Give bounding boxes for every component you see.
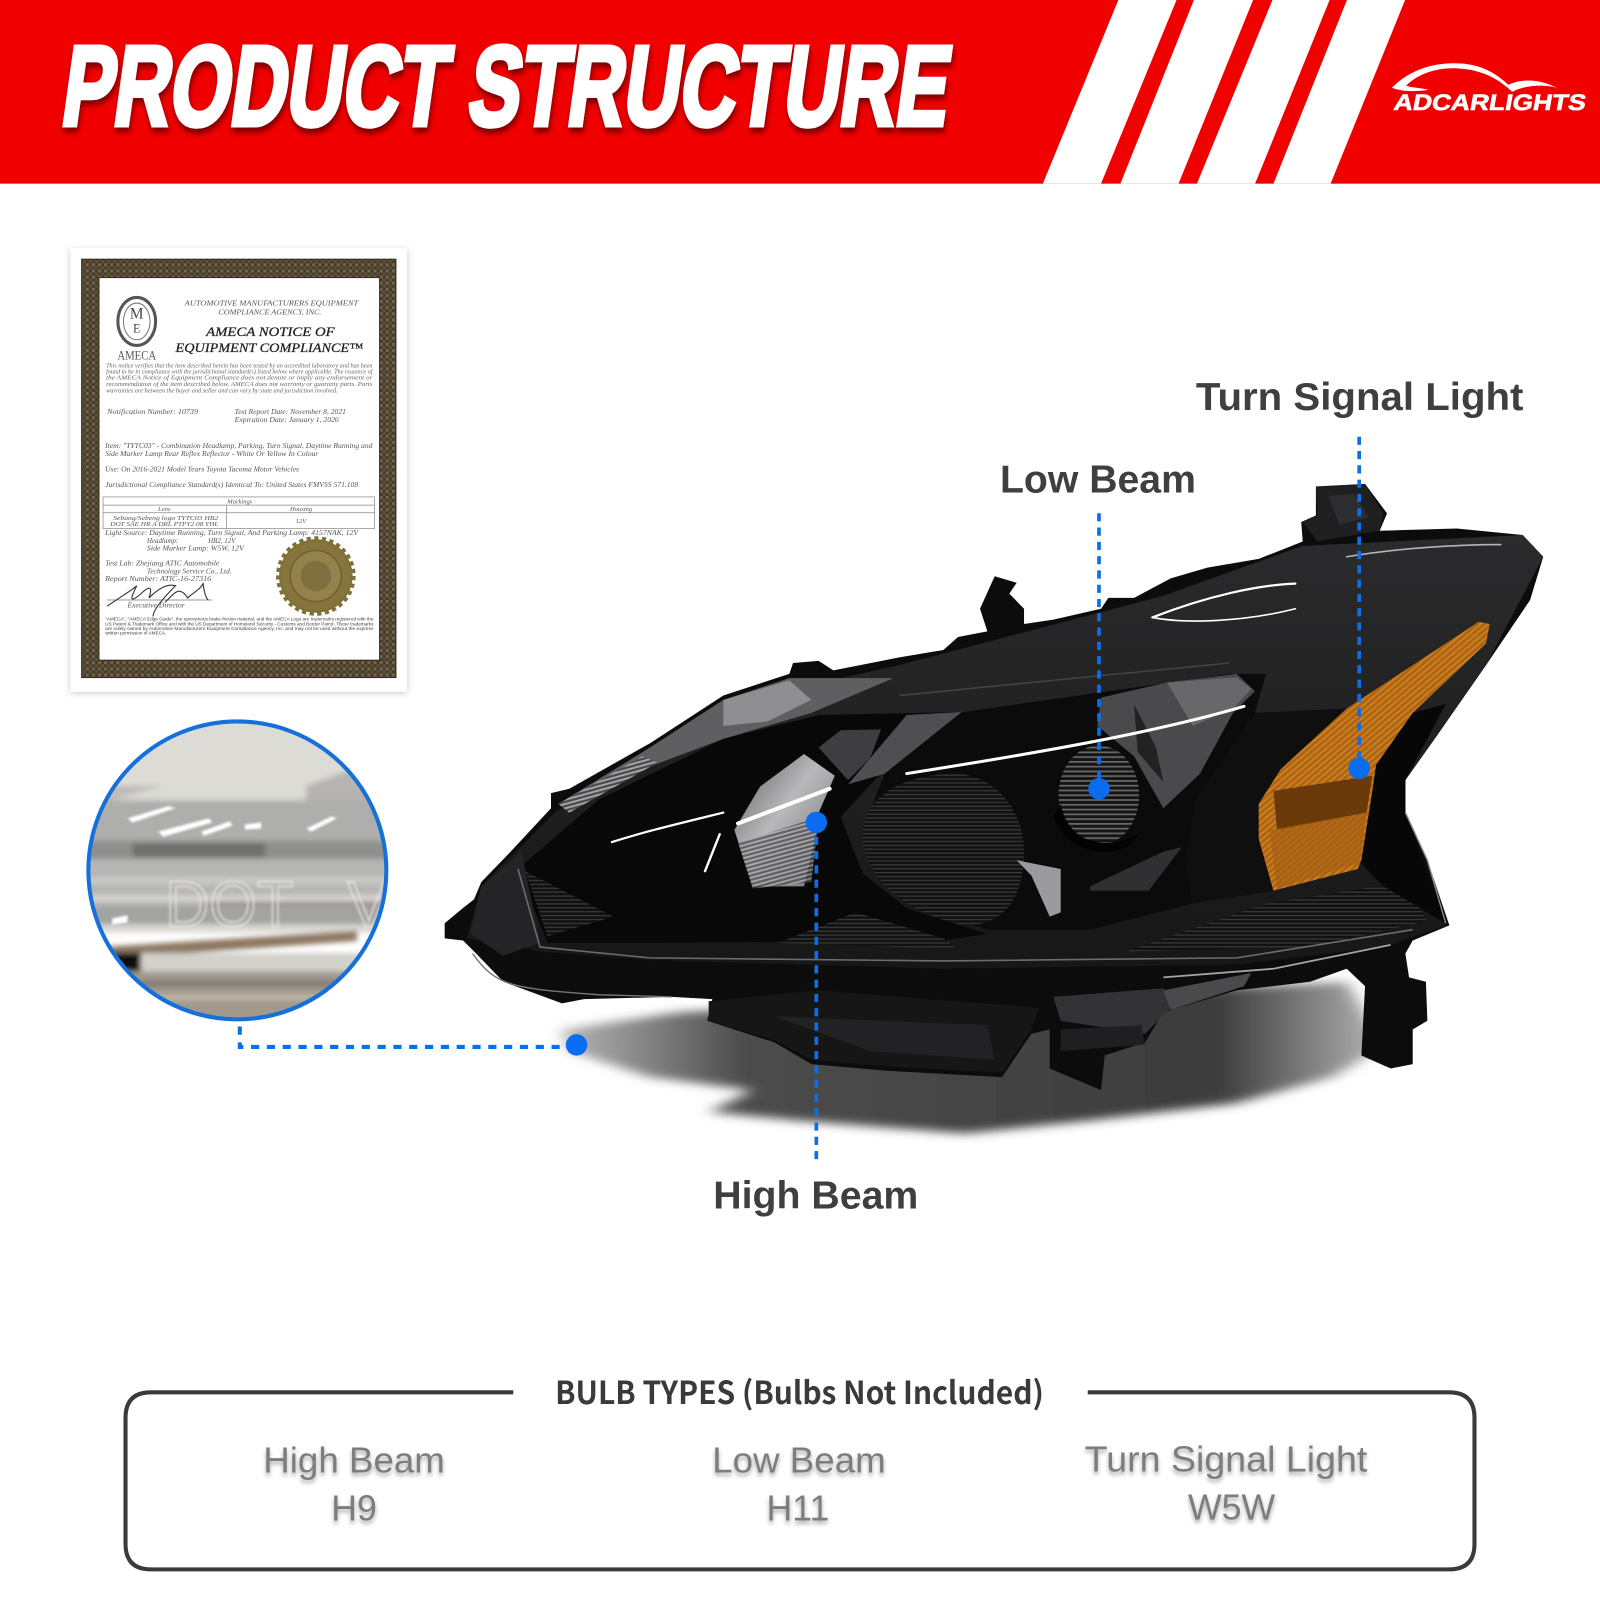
certificate light source and lab text: Executive Director <box>126 603 185 610</box>
ground shadow <box>562 982 1383 1134</box>
projector bezel <box>863 674 1266 930</box>
certificate markings table: Housing <box>289 506 313 513</box>
logo: ADCARLIGHTS <box>1392 63 1588 115</box>
high beam chrome reflector <box>734 712 962 888</box>
column: high beam: High Beam <box>263 1440 445 1480</box>
lens highlights <box>112 806 337 924</box>
panel: AMECA certificate: Expiration Date: January 1, 2026 <box>234 417 339 424</box>
label: Low Beam: Low Beam <box>1000 458 1196 501</box>
certificate body text: recommendation of the item described below. AMECA does not warranty or guaranty parts. Parts <box>106 381 373 388</box>
column: turn signal light: W5W <box>1188 1487 1276 1527</box>
column: high beam: H9 <box>331 1488 377 1528</box>
column: turn signal light <box>1085 1439 1367 1527</box>
label: High Beam: High Beam <box>713 1175 918 1218</box>
certificate markings table <box>103 497 374 529</box>
certificate body text: the AMECA Notice of Equipment Compliance does not denote or imply any endorsement or <box>106 375 373 382</box>
certificate light source and lab text: Headlamp: <box>146 538 178 545</box>
certificate markings table: Markings <box>226 499 253 506</box>
callout dot <box>806 812 827 833</box>
certificate heading: AMECA NOTICE OF <box>205 325 335 339</box>
certificate markings table: Lens <box>157 506 171 513</box>
column: turn signal light: Turn Signal Light <box>1085 1439 1367 1479</box>
certificate light source and lab text <box>104 530 359 610</box>
certificate fine print: US Patent & Trademark Office and with the US Department of Homeland Security - Customs and Border Patrol. These trademarks <box>105 622 373 627</box>
column: low beam <box>712 1440 886 1528</box>
certificate light source and lab text: Light Source: Daytime Running, Turn Signal, And Parking Lamp: 4157NAK, 12V <box>104 530 359 537</box>
dark column beside amber reflector <box>1185 709 1347 904</box>
label: Turn Signal Light: Turn Signal Light <box>1196 376 1524 419</box>
lens body <box>467 535 1543 969</box>
certificate body text: This notice verifies that the item described herein has been tested by an accredited laboratory and has been <box>106 362 373 369</box>
label: Low Beam <box>1000 458 1196 799</box>
panel: AMECA certificate: Test Report Date: November 8, 2021 <box>235 409 346 416</box>
certificate light source and lab text: Side Marker Lamp: W5W, 12V <box>147 546 245 553</box>
certificate light source and lab text: Technology Service Co., Ltd. <box>147 568 232 575</box>
bulb types heading: BULB TYPES (Bulbs Not Included) <box>555 1368 1044 1414</box>
embossed DOT marking: V <box>347 868 391 941</box>
striped reflector disc <box>863 774 1024 925</box>
low beam lens <box>1017 745 1182 917</box>
embossed DOT marking: DOT <box>165 868 294 941</box>
title: PRODUCT STRUCTURE <box>56 23 959 150</box>
black inner bezel left <box>518 712 987 943</box>
panel: AMECA certificate: Jurisdictional Compliance Standard(s) Identical To: United States FMVSS 571.108 <box>105 482 359 489</box>
certificate heading: EQUIPMENT COMPLIANCE™ <box>174 341 363 355</box>
callout line <box>1097 513 1101 789</box>
column: low beam: Low Beam <box>712 1440 886 1480</box>
certificate markings table: 12V <box>296 518 307 525</box>
white lens highlights <box>612 545 1501 871</box>
clear lens upper-left <box>558 678 893 813</box>
panel: bulb types <box>126 1368 1474 1569</box>
panel: AMECA certificate: Side Marker Lamp Rear Reflex Reflector - White Or Yellow In Colour <box>105 451 319 458</box>
signature <box>107 584 212 616</box>
black band right of amber reflector <box>1360 704 1446 923</box>
certificate heading: COMPLIANCE AGENCY, INC. <box>218 307 322 316</box>
icon: AMECA monogram <box>117 297 157 363</box>
lamp silhouette <box>445 484 1543 1090</box>
certificate light source and lab text: HB2, 12V <box>207 538 236 545</box>
label: High Beam <box>713 812 918 1218</box>
certificate heading: AUTOMOTIVE MANUFACTURERS EQUIPMENT <box>184 299 359 308</box>
lower housing <box>709 973 1251 1073</box>
racing stripes <box>1043 0 1405 184</box>
certificate light source and lab text: Report Number: ATIC-16-27316 <box>104 576 212 583</box>
icon: gold seal <box>279 539 353 613</box>
callout line <box>815 822 818 1160</box>
certificate markings table: Sebang/Sebeng logo TYTC03 HB2 <box>113 515 219 522</box>
callout line <box>1357 437 1361 768</box>
icon: AMECA monogram: AMECA <box>117 349 157 363</box>
embossed DOT marking <box>168 880 384 928</box>
certificate body text: warranties are between the buyer and seller and can vary by state and jurisdiction involved. <box>106 388 338 394</box>
panel: AMECA certificate: Notification Number: 10739 <box>106 409 199 416</box>
certificate fine print: "AMECA", "AMECA Edge Guide", the eponymous brake friction material, and the AMECA Logo are trademarks registered with the <box>105 616 374 621</box>
connector tabs <box>1303 484 1383 542</box>
certificate heading <box>174 299 363 355</box>
bezel trim lines <box>473 663 1446 997</box>
label: Turn Signal Light <box>1196 376 1524 779</box>
panel: AMECA certificate: Use: On 2016-2021 Model Years Toyota Tacoma Motor Vehicles <box>105 466 299 473</box>
panel: DOT close-up circle <box>82 714 398 1022</box>
column: low beam: H11 <box>767 1488 829 1528</box>
headlight product illustration <box>445 484 1543 1134</box>
certificate light source and lab text: Test Lab: Zhejiang ATIC Automobile <box>105 560 219 567</box>
callout: DOT detail connector <box>240 1027 587 1056</box>
column: high beam <box>263 1440 445 1528</box>
certificate markings table: DOT SAE HR A DRL PTPY2 08 YHL <box>109 521 219 528</box>
amber turn signal reflector <box>1259 622 1490 891</box>
callout dot <box>1088 778 1110 799</box>
certificate fine print: are solely owned by Automotive Manufacturers Equipment Compliance Agency, Inc. and may not be used without the express <box>105 626 373 631</box>
reflector cavity <box>1097 674 1255 808</box>
header banner <box>0 0 1600 184</box>
panel: AMECA certificate: Item: "TYTC03" - Combination Headlamp, Parking, Turn Signal, Daytime Running and <box>104 443 373 450</box>
certificate fine print <box>105 616 374 636</box>
panel: AMECA certificate <box>70 248 407 693</box>
certificate body text: found to be in compliance with the jurisdictional standard(s) listed below where applicable. The issuance of <box>106 368 374 375</box>
logo: ADCARLIGHTS: ADCARLIGHTS <box>1392 90 1588 115</box>
callout dot <box>1348 758 1370 779</box>
certificate fine print: written permission of AMECA. <box>105 631 166 636</box>
icon: AMECA monogram: E <box>133 322 140 336</box>
stripe panels <box>470 852 1427 956</box>
icon: AMECA monogram: M <box>130 305 144 322</box>
certificate body text <box>106 362 374 394</box>
